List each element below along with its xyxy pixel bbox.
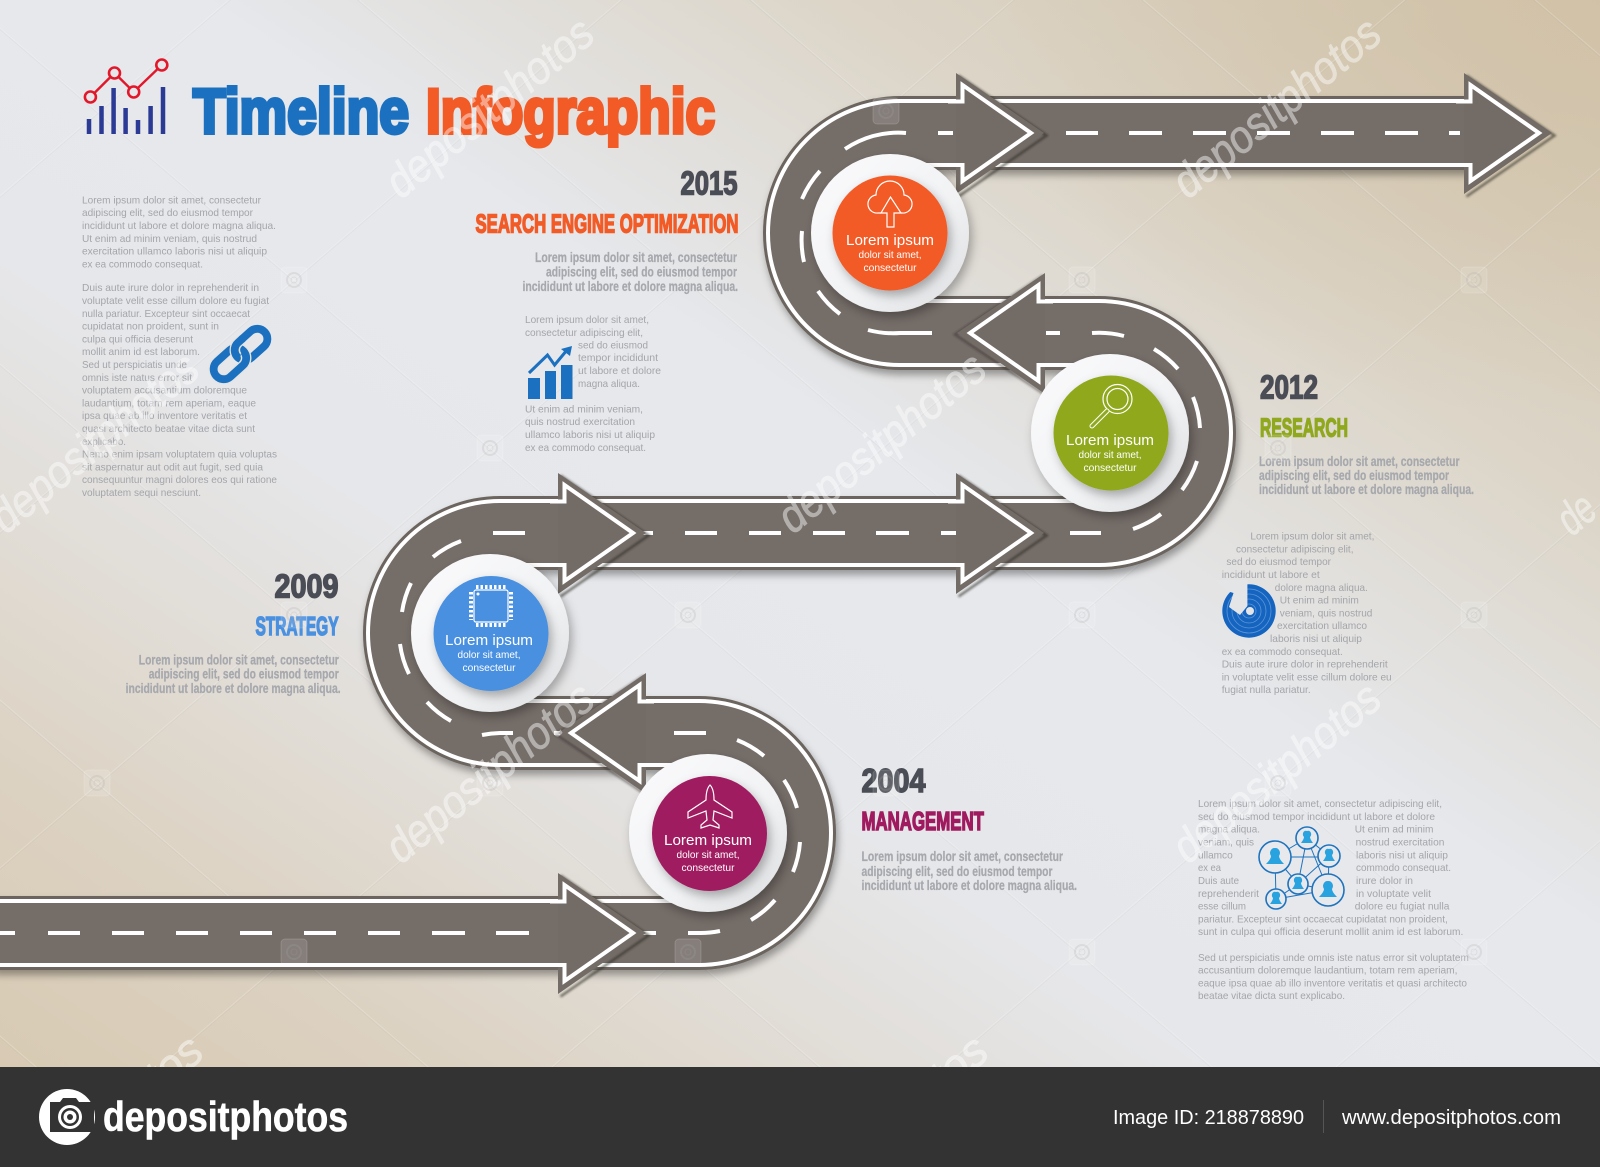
text block: left column: incididunt ut labore et dolore magna aliqua. [82,220,276,232]
text block: left column: omnis iste natus error sit [82,372,192,384]
text block: right column: incididunt ut labore et [1222,569,1320,581]
title [193,77,715,147]
text block: right column: veniam, quis nostrud [1280,608,1373,620]
text block: bottom right column: beatae vitae dicta sunt explicabo. [1198,990,1345,1002]
arrow head: final [1456,73,1554,196]
text block: bottom right column: irure dolor in [1356,875,1413,887]
icon: airplane [688,785,732,828]
text block: 2004 description: adipiscing elit, sed do eiusmod tempor [862,863,1053,879]
text block: left column: voluptatem sequi nesciunt. [82,487,201,499]
text block: bottom right column: veniam, quis [1198,836,1254,848]
milestone 2004 circle: dolor sit amet, [676,849,740,861]
text block: right column: in voluptate velit esse cillum dolore eu [1222,672,1392,684]
heading: 2009 [256,567,338,641]
text block: center column: ut labore et dolore [578,365,661,377]
arrow head: row 533 left [550,473,648,596]
text block: left column: voluptatem accusantium doloremque [82,384,247,396]
heading: 2015: SEARCH ENGINE OPTIMIZATION [476,208,738,238]
text block: bottom right column: sunt in culpa qui officia deserunt mollit anim id est laborum. [1198,926,1463,938]
text block: left column: ipsa quae ab illo inventore veritatis et [82,410,247,422]
text block: 2012 description: Lorem ipsum dolor sit amet, consectetur [1259,453,1460,469]
arrow head: row 733 [556,673,654,794]
text block: left column: Lorem ipsum dolor sit amet, consectetur [82,194,261,206]
text block: right column: Duis aute irure dolor in reprehenderit [1222,658,1388,670]
text block: center column [525,314,661,454]
text block: bottom right column: magna aliqua. [1198,824,1260,836]
road [0,133,1470,933]
text block: left column: cupidatat non proident, sunt in [82,320,219,332]
text block: bottom right column: dolore eu fugiat nulla [1355,900,1450,912]
text block: right column: exercitation ullamco [1277,620,1367,632]
text block: center column: Lorem ipsum dolor sit amet, [525,314,649,326]
text block: 2009 description: Lorem ipsum dolor sit amet, consectetur [139,652,339,668]
text block: bottom right column: nostrud exercitation [1356,836,1445,848]
title: Infographic [426,77,715,147]
text block: bottom right column: Sed ut perspiciatis unde omnis iste natus error sit voluptatem [1198,952,1469,964]
text block: bottom right column: eaque ipsa quae ab illo inventore veritatis et quasi architecto [1198,978,1467,990]
heading: 2004: MANAGEMENT [862,806,984,836]
text block: left column: nulla pariatur. Excepteur sint occaecat [82,308,250,320]
icon: people network [1259,827,1344,909]
text block: bottom right column: accusantium doloremque laudantium, totam rem aperiam, [1198,964,1457,976]
milestone 2012 circle [1031,354,1189,512]
milestone 2009 circle [411,554,569,712]
text block: bottom right column: commodo consequat. [1356,862,1451,874]
text block: 2015 description: adipiscing elit, sed do eiusmod tempor [546,264,737,280]
heading: 2009: 2009 [274,567,338,604]
text block: bottom right column: Ut enim ad minim [1355,824,1434,836]
milestone 2015 circle: Lorem ipsum [846,232,934,249]
text block: bottom right column: ullamco [1198,850,1233,862]
icon: radial chart [1215,580,1276,638]
icon: chain link [209,325,272,383]
text block: 2009 description: incididunt ut labore et dolore magna aliqua. [126,680,341,696]
heading: 2015: 2015 [680,164,738,201]
text block: bottom right column: esse cillum [1198,900,1246,912]
text block: right column: Lorem ipsum dolor sit amet, [1250,530,1374,542]
watermark: wordmarks: depositphotos [1161,671,1391,873]
text block: 2004 description: Lorem ipsum dolor sit amet, consectetur [862,848,1063,864]
text block: right column: ex ea commodo consequat. [1222,646,1343,658]
text block: right column [1222,530,1392,696]
text block: center column: magna aliqua. [578,378,640,390]
text block: 2009 description [126,652,341,696]
milestone 2012 circle: dolor sit amet, [1078,449,1142,461]
text block: left column: laudantium, totam rem aperiam, eaque [82,398,256,410]
watermark: camera icons [84,98,1487,965]
text block: 2012 description: incididunt ut labore et dolore magna aliqua. [1259,481,1474,497]
text block: bottom right column: reprehenderit [1198,888,1259,900]
text block: 2015 description [522,249,738,294]
milestone 2009 circle: Lorem ipsum [445,632,533,649]
text block: 2004 description: incididunt ut labore et dolore magna aliqua. [862,877,1077,893]
milestone 2015 circle: dolor sit amet, [858,249,922,261]
text block: bottom right column: Duis aute [1198,875,1239,887]
footer url: www.depositphotos.com [1341,1107,1561,1129]
text block: 2004 description [862,848,1077,893]
arrow head: row 133 middle [948,73,1046,196]
watermark: wordmarks: depositphotos [766,341,996,543]
text block: left column: exercitation ullamco laboris nisi ut aliquip [82,246,267,258]
text block: center column: ex ea commodo consequat. [525,442,646,454]
text block: left column: explicabo. [82,436,126,448]
icon: title chart [85,60,167,134]
text block: 2012 description: adipiscing elit, sed do eiusmod tempor [1259,467,1449,483]
text block: center column: consectetur adipiscing elit, [525,327,643,339]
text block: left column: Nemo enim ipsam voluptatem quia voluptas [82,448,277,460]
heading: 2015 [476,164,738,238]
text block: bottom right column: laboris nisi ut aliquip [1356,850,1448,862]
text block: 2015 description: incididunt ut labore et dolore magna aliqua. [522,278,738,294]
icon: chip [471,587,511,625]
text block: 2009 description: adipiscing elit, sed do eiusmod tempor [149,666,339,682]
heading: 2012 [1260,368,1348,442]
heading: 2004: 2004 [862,762,926,799]
heading: 2012: 2012 [1260,368,1318,405]
milestone 2012 circle: Lorem ipsum [1066,432,1154,449]
watermark: wordmarks: tos [133,1023,213,1102]
icon: cloud upload [868,181,912,227]
road dashes [0,133,1460,933]
icon: footer camera logo [39,1089,95,1145]
heading: 2012: RESEARCH [1260,412,1348,442]
text block: left column: Duis aute irure dolor in reprehenderit in [82,282,259,294]
text block: left column: sit aspernatur aut odit aut fugit, sed quia [82,462,263,474]
milestone 2015 circle: consectetur [864,262,917,274]
footer bar [0,1067,1600,1167]
milestone 2004 circle: consectetur [682,862,735,874]
milestone 2015 circle [811,154,969,312]
text block: bottom right column: in voluptate velit [1356,888,1431,900]
text block: right column: dolore magna aliqua. [1275,582,1368,594]
text block: bottom right column: pariatur. Excepteur sint occaecat cupidatat non proident, [1198,914,1448,926]
text block: left column: ex ea commodo consequat. [82,258,203,270]
text block: bottom right column: Lorem ipsum dolor sit amet, consectetur adipiscing elit, [1198,798,1442,810]
text block: center column: tempor incididunt [578,352,658,364]
text block: left column: voluptate velit esse cillum dolore eu fugiat [82,295,269,307]
text block: bottom right column: sed do eiusmod tempor incididunt ut labore et dolore [1198,811,1435,823]
footer logo wordmark: depositphotos [103,1093,348,1140]
footer image id: Image ID: 218878890 [1113,1107,1304,1129]
milestone 2012 circle: consectetur [1084,462,1137,474]
text block: left column: quasi architecto beatae vitae dicta sunt [82,423,255,435]
text block: center column: quis nostrud exercitation [525,416,635,428]
text block: left column: culpa qui officia deserunt [82,334,193,346]
heading: 2009: STRATEGY [256,611,338,641]
title: Timeline [193,77,409,147]
heading: 2004 [862,762,984,836]
text block: right column: laboris nisi ut aliquip [1270,633,1362,645]
arrow head: row 333 [955,273,1053,394]
text block: right column: fugiat nulla pariatur. [1222,684,1311,696]
text block: left column [82,194,277,499]
watermark: wordmarks: tos [918,1023,998,1102]
text block: center column: Ut enim ad minim veniam, [525,404,643,416]
text block: 2012 description [1259,453,1474,497]
milestone 2004 circle [629,754,787,912]
text block: center column: sed do eiusmod [578,340,648,352]
text block: right column: consectetur adipiscing elit, [1236,544,1354,556]
milestone 2009 circle: consectetur [462,662,516,674]
milestone 2009 circle: dolor sit amet, [458,649,520,661]
arrow head: row 533 right [948,473,1046,596]
text block: left column: consequuntur magni dolores eos qui ratione [82,474,277,486]
text block: bottom right column: ex ea [1198,862,1221,874]
text block: bottom right column [1198,798,1469,1002]
icon: magnifier [1092,384,1132,426]
text block: right column: Ut enim ad minim [1280,594,1359,606]
text block: left column: Ut enim ad minim veniam, quis nostrud [82,233,257,245]
milestone 2004 circle: Lorem ipsum [664,832,752,849]
text block: left column: mollit anim id est laborum. [82,346,200,358]
arrow head: row 933 [550,873,648,996]
text block: left column: adipiscing elit, sed do eiusmod tempor [82,207,253,219]
text block: right column: sed do eiusmod tempor [1226,556,1331,568]
text block: left column: Sed ut perspiciatis unde [82,359,187,371]
watermark: wordmarks: depositphotos [374,671,604,873]
text block: center column: ullamco laboris nisi ut aliquip [525,429,655,441]
icon: growth chart [528,346,572,399]
text block: 2015 description: Lorem ipsum dolor sit amet, consectetur [535,249,737,265]
